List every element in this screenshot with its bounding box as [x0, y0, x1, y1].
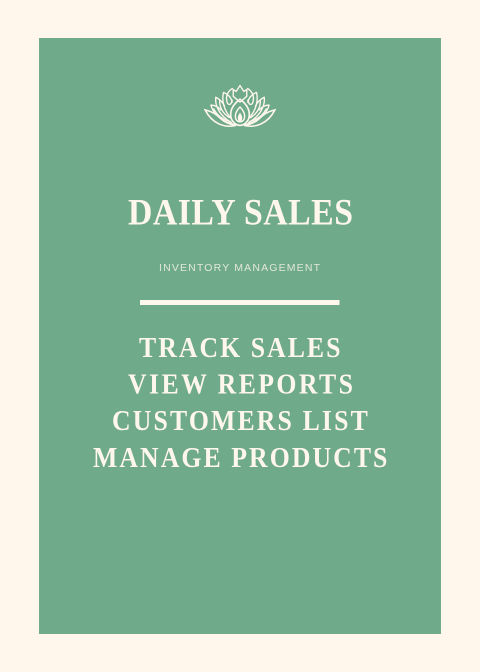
list item: track sales: TRACK SALES — [139, 332, 340, 363]
feature list — [93, 332, 387, 473]
list item: customers list: CUSTOMERS LIST — [112, 405, 368, 436]
lotus: right petals — [244, 89, 275, 126]
divider bar — [140, 300, 340, 305]
list item: manage products: MANAGE PRODUCTS — [93, 442, 387, 473]
lotus: left petals — [205, 89, 236, 126]
subtitle: INVENTORY MANAGEMENT — [159, 262, 321, 274]
panel: green card — [39, 38, 441, 634]
title: DAILY SALES — [128, 191, 353, 233]
list item: view reports: VIEW REPORTS — [128, 369, 353, 400]
icon: lotus — [205, 86, 275, 126]
